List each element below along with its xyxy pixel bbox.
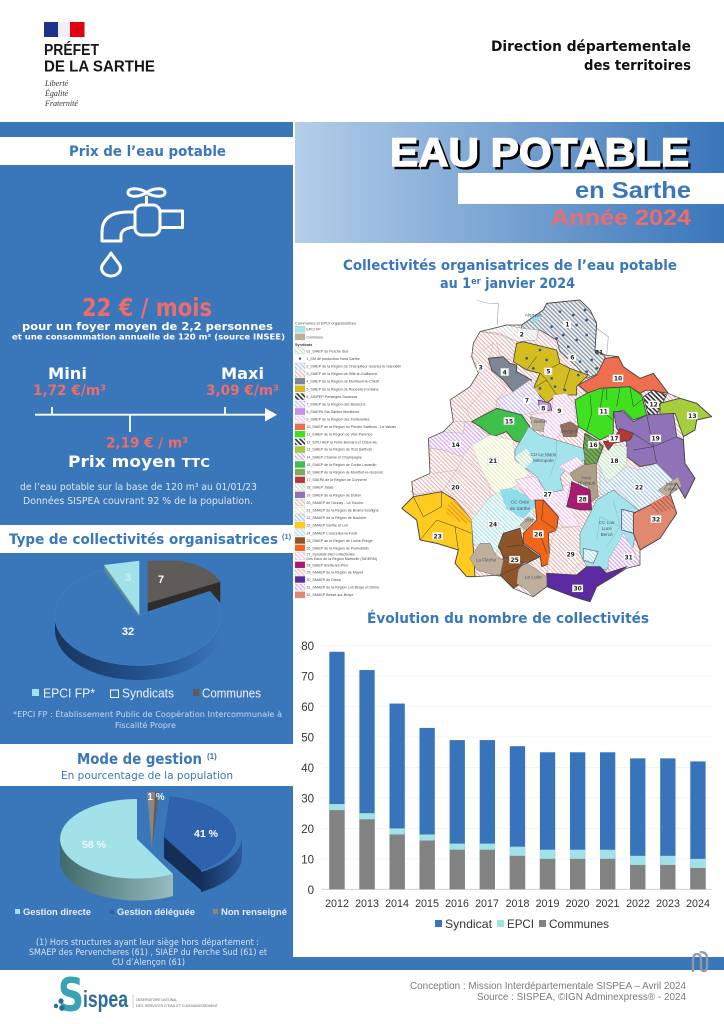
bar chart: évolution du nombre de collectivités: 2016 — [445, 898, 469, 910]
pie chart: type de collectivités — [55, 561, 221, 680]
logo: préfet de la Sarthe: Fraternité — [44, 99, 78, 108]
heading: collectivités organisatrices — [343, 258, 677, 292]
heading: collectivités organisatrices: Collectivités organisatrices de l’eau potable — [343, 258, 677, 274]
pie chart: mode de gestion: 58 % — [82, 839, 107, 851]
title: eau potable: EAU POTABLE — [390, 131, 689, 175]
collectivity names on map: de Sarthe — [510, 506, 530, 511]
legend: type de collectivités: Syndicats — [122, 686, 174, 700]
map legend: Des Eaux de la Région Mancelle (SIDERM) — [306, 557, 377, 561]
logo: préfet de la Sarthe: Liberté — [44, 79, 69, 88]
legend: type de collectivités: Communes — [202, 686, 261, 700]
map legend: 13_SIAEP de la Région de l’Est Sarthois — [306, 448, 372, 452]
note: EPCI FP definition — [13, 708, 282, 730]
bar chart: évolution du nombre de collectivités: 40 — [301, 763, 314, 775]
map legend: Commune — [306, 335, 323, 339]
map legend: 12_SIVU AEP la Ferté-Bernard et Chéré-Au — [306, 440, 377, 444]
region numbers: 16 — [589, 442, 597, 449]
region numbers — [432, 321, 698, 593]
region numbers: 32 — [652, 516, 660, 523]
map legend: 4_SIAEP de la Région de Montreuil-le-Chétif — [306, 380, 380, 384]
region numbers: 31 — [625, 554, 633, 561]
heading: type de collectivités: Type de collectivités organisatrices — [9, 532, 278, 548]
bar chart: évolution du nombre de collectivités: 2014 — [385, 898, 409, 910]
text: household basis: pour un foyer moyen de 2,2 personnes — [22, 320, 273, 333]
map legend: 3_SIAEP de la Région de Sillé-le-Guillaume — [306, 372, 377, 376]
collectivity names on map: La Flèche — [476, 558, 497, 563]
bar chart: évolution du nombre de collectivités: 2023 — [656, 898, 680, 910]
icon: water tap — [102, 189, 182, 276]
region numbers: 28 — [579, 496, 587, 503]
heading: direction départementale: Direction départementale — [491, 39, 691, 55]
logo: préfet de la Sarthe — [44, 22, 155, 108]
collectivity names on map: CU Le Mans — [530, 452, 557, 457]
heading: mode de gestion: Mode de gestion — [77, 750, 202, 768]
legend: mode de gestion: Gestion déléguée — [117, 907, 195, 917]
map legend: 9_SIAEP de la Région des Fontenelles — [306, 418, 370, 422]
map legend: 30_SMAEP de Dienu — [306, 578, 341, 582]
subtitle band: en Sarthe: en Sarthe — [575, 177, 691, 203]
map legend: 32_SMAEP Bessé-sur-Braye — [306, 593, 353, 597]
logo: Sispea: ispea — [83, 986, 128, 1012]
region numbers: 12 — [650, 402, 658, 409]
region numbers: 21 — [489, 458, 497, 465]
heading: collectivités organisatrices: janvier 2024 — [481, 276, 575, 292]
scale: mini maxi average price: 1,72 €/m³ — [33, 383, 106, 399]
bar chart: évolution du nombre de collectivités: 70 — [301, 672, 314, 684]
logo: Sispea: DES SERVICES D’EAU ET D’ASSAINISSEMENT — [136, 1004, 219, 1008]
commune boundaries in EPCI areas — [540, 440, 620, 547]
bar chart: évolution du nombre de collectivités: 2024 — [686, 898, 710, 910]
region numbers: 20 — [451, 484, 459, 491]
collectivity names on map: Alençon — [525, 313, 542, 318]
region numbers: 61 — [595, 350, 603, 357]
commune boundaries — [413, 357, 677, 575]
bar chart: évolution du nombre de collectivités: 60 — [301, 702, 314, 714]
bar chart: évolution du nombre de collectivités: Communes — [549, 917, 609, 931]
map legend: 22_SMAEP de la Région de Bouloire — [306, 516, 366, 520]
bar chart: évolution du nombre de collectivités: 80 — [301, 641, 314, 653]
department outline — [402, 300, 712, 602]
region numbers: 18 — [610, 458, 618, 465]
region numbers: 14 — [452, 442, 460, 449]
heading: mode de gestion: (1) — [207, 752, 217, 761]
heading: mode de gestion — [0, 744, 293, 786]
map legend: 17_SAEPA de la Région de Connerré — [306, 478, 367, 482]
heading: type de collectivités: (1) — [282, 532, 292, 541]
region numbers: 23 — [434, 533, 442, 540]
bar chart: évolution du nombre de collectivités — [301, 641, 712, 931]
credits: Source : SISPEA, ©IGN Adminexpress® - 2024 — [477, 992, 686, 1003]
bar chart: évolution du nombre de collectivités: Syndicat — [445, 917, 493, 931]
price: 22 euros per month: 22 € / mois — [82, 293, 212, 322]
bar chart: évolution du nombre de collectivités: 2018 — [506, 898, 529, 910]
text: household basis — [12, 320, 285, 342]
map legend: 19_SIAEP de la Région de Dollon — [306, 493, 361, 497]
region numbers: 8 — [541, 406, 545, 413]
heading: mode de gestion: En pourcentage de la population — [61, 770, 233, 782]
bar chart: évolution du nombre de collectivités: 10 — [301, 854, 314, 866]
text: price basis note: Données SISPEA couvrant 92 % de la population. — [23, 496, 253, 507]
map legend: 7_SIAEP de la Région des Buissons — [306, 402, 366, 406]
collectivity names on map: Lucé — [602, 526, 612, 531]
heading: prix de l'eau potable — [0, 137, 293, 165]
region numbers: 6 — [570, 355, 574, 362]
pie chart: type de collectivités: 32 — [122, 626, 134, 638]
legend: mode de gestion: Gestion directe — [23, 907, 91, 917]
region numbers: 7 — [525, 398, 529, 405]
map legend: 1_SM de production Nord Sarthe — [306, 357, 360, 361]
region numbers: 5 — [546, 369, 550, 376]
bar chart: évolution du nombre de collectivités: 2012 — [325, 898, 349, 910]
pie chart: mode de gestion: 1 % — [147, 792, 165, 803]
region numbers: 24 — [489, 521, 497, 528]
map of water authorities — [402, 300, 712, 602]
bar chart: évolution du nombre de collectivités: 2020 — [566, 898, 589, 910]
legend: mode de gestion — [15, 907, 287, 917]
heading: évolution: Évolution du nombre de collectivités — [367, 610, 649, 627]
map legend: 24_SMAEP Courcelles-la-Forêt — [306, 531, 357, 535]
map legend: 2_SIAEP de la Région de Champfleur Gesnes-le-Gandelin — [306, 365, 401, 369]
map legend: 27_Syndicat Inter-collectivités — [306, 552, 355, 556]
label: prix moyen TTC: Prix moyen TTC — [68, 452, 210, 471]
map legend: 20_SMAEP de l’Aunay - La Touche — [306, 501, 363, 505]
logo: préfet de la Sarthe: DE LA SARTHE — [44, 58, 155, 76]
region numbers: 29 — [567, 552, 575, 559]
bar chart: évolution du nombre de collectivités: EPCI — [507, 917, 534, 931]
subtitle: année 2024: Année 2024 — [551, 205, 692, 230]
logo: préfet de la Sarthe: Égalité — [44, 88, 69, 98]
legend: type de collectivités — [32, 686, 261, 700]
region numbers: 11 — [600, 409, 608, 416]
map legend: 14_SIAEP Charnie et Champagne — [306, 455, 362, 459]
note: structures hors département — [29, 937, 268, 968]
region numbers: 4 — [503, 369, 507, 376]
region numbers: 19 — [652, 436, 660, 443]
map legend: 28_SIAEP Brette-les-Pins — [306, 563, 348, 567]
collectivity names on map: Bercé — [601, 532, 613, 537]
bar chart: évolution du nombre de collectivités: 2021 — [596, 898, 619, 910]
pie chart: type de collectivités: 3 — [125, 572, 131, 584]
commune boundaries in hatched areas — [433, 342, 500, 490]
legend: type de collectivités: EPCI FP* — [43, 686, 95, 700]
scale: mini maxi average price: 3,09 €/m³ — [206, 383, 279, 399]
note: structures hors département: (1) Hors structures ayant leur siège hors département : — [36, 937, 259, 948]
logo: Sispea: OBSERVATOIRE NATIONAL — [136, 998, 177, 1002]
heading: collectivités organisatrices: er — [471, 277, 481, 287]
scale: mini maxi average price: 2,19 € / m³ — [106, 436, 188, 452]
map legend — [295, 321, 401, 598]
credits — [410, 981, 686, 1003]
region numbers: 13 — [688, 413, 696, 420]
scale: mini maxi average price — [33, 364, 279, 452]
text: price basis note — [20, 482, 257, 507]
logo: préfet de la Sarthe: PRÉFET — [44, 42, 99, 59]
region numbers: 15 — [505, 418, 513, 425]
scale: mini maxi average price: Mini — [48, 364, 87, 383]
collectivity names on map: Oizé — [525, 518, 535, 523]
panel: header gradient — [295, 122, 724, 243]
map legend: 23_SMAEP Sarthe et Loir — [306, 524, 349, 528]
title: eau potable: EAU POTABLE — [392, 134, 692, 178]
bar chart: évolution du nombre de collectivités: 30 — [301, 794, 314, 806]
collectivity names on map: Métropole — [533, 458, 554, 463]
pie chart: mode de gestion — [60, 792, 242, 901]
panel: left blue column — [0, 122, 293, 970]
map legend: 5_SIAEP de la Région de Rouessé-Fontaine — [306, 387, 379, 391]
text: household basis: et une consommation annuelle de 120 m³ (source INSEE) — [12, 332, 285, 342]
credits: Conception : Mission Interdépartementale SISPEA – Avril 2024 — [410, 981, 686, 992]
water source dots — [525, 309, 598, 391]
text: price basis note: de l’eau potable sur la base de 120 m³ au 01/01/23 — [20, 482, 257, 493]
region numbers: 25 — [511, 557, 519, 564]
heading: collectivités organisatrices: au 1 — [440, 276, 474, 292]
region numbers: 22 — [635, 485, 643, 492]
map legend: 15_SIAEP de la Région de Conlie-Lavardin — [306, 463, 376, 467]
bar chart: évolution du nombre de collectivités: 50 — [301, 732, 314, 744]
collectivity names on map: Saint — [665, 481, 677, 486]
map legend: 26_SIAEP de la Région de Pontvallain — [306, 546, 369, 550]
map legend: Syndicats — [295, 343, 312, 347]
map legend: 31_SMAEP de la Région Loir Braye et Dême — [306, 586, 379, 590]
collectivity names on map: Calais — [664, 487, 678, 492]
region numbers: 17 — [610, 436, 618, 443]
map legend: Communes et EPCI organisatrices — [295, 321, 356, 326]
collectivity names on map: CC Loir — [599, 520, 615, 525]
logo: Sispea: S — [58, 968, 84, 1022]
logo: Sispea — [54, 968, 219, 1022]
region numbers: 9 — [557, 408, 561, 415]
note: EPCI FP definition: Fiscalité Propre — [115, 720, 176, 730]
map legend: 8_SIAEPA Ste-Sabine Montbizot — [306, 410, 359, 414]
scale: mini maxi average price: Maxi — [221, 364, 264, 383]
collectivity names on map: CC Orée — [511, 499, 530, 504]
map legend: 29_SMAEP de la Région de Mayet — [306, 571, 363, 575]
heading: direction départementale: des territoires — [584, 58, 691, 74]
note: structures hors département: CU d’Alençon (61) — [112, 958, 185, 968]
map legend: EPCI FP — [306, 328, 321, 332]
bar chart: évolution du nombre de collectivités: 2022 — [626, 898, 650, 910]
heading: type de collectivités — [0, 525, 293, 553]
collectivity names on map: Le Lude — [525, 575, 542, 580]
bar chart: évolution du nombre de collectivités: 0 — [308, 885, 314, 897]
map legend: 01_SIAEP du Perche Sud — [306, 349, 348, 353]
region numbers: 1 — [565, 322, 569, 329]
legend: mode de gestion: Non renseigné — [221, 907, 287, 917]
region numbers: 26 — [534, 531, 542, 538]
note: structures hors département: SMAEP des Pervencheres (61) , SIAEP du Perche Sud (61) et — [29, 948, 268, 958]
pie chart: type de collectivités: 7 — [158, 574, 164, 586]
bar chart: évolution du nombre de collectivités: 2013 — [355, 898, 379, 910]
bar chart: évolution du nombre de collectivités: 2019 — [536, 898, 559, 910]
region numbers: 27 — [544, 492, 552, 499]
bar chart: évolution du nombre de collectivités: 2015 — [415, 898, 439, 910]
collectivity names on map — [476, 313, 678, 580]
pie chart: mode de gestion: 41 % — [194, 828, 219, 840]
map legend: 10_SIAEP de la Région du Perche Sarthois - Le Vairais — [306, 425, 396, 429]
collectivity names on map: l'Évêque — [578, 480, 596, 486]
map legend: 21_SMAEP de la Région de Brains-Souligné — [306, 509, 379, 513]
map legend: 25_SIAEP de la Région de Luché-Pringé — [306, 539, 373, 543]
heading: direction départementale — [491, 39, 691, 74]
region numbers: 2 — [520, 332, 524, 339]
bar chart: évolution du nombre de collectivités: 20 — [301, 824, 314, 836]
region numbers: 3 — [479, 364, 483, 371]
collectivity names on map: Savigné — [561, 429, 578, 434]
region numbers: 10 — [614, 376, 622, 383]
map legend: 16_SIAEP de la Région de Montfort-le-Gesnois — [306, 471, 383, 475]
collectivity names on map: Ballon — [534, 419, 548, 424]
region numbers: 30 — [574, 586, 582, 593]
icon: watermark — [693, 952, 707, 972]
map legend: 18_SIAEP Jalais — [306, 486, 334, 490]
heading: prix de l'eau potable: Prix de l’eau potable — [69, 144, 226, 160]
note: EPCI FP definition: *EPCI FP : Établissement Public de Coopération Intercommunale à — [13, 708, 282, 719]
map legend: 11_SIAEP de la Région de Vive-Parence — [306, 433, 372, 437]
bar chart: évolution du nombre de collectivités: 2017 — [475, 898, 499, 910]
subtitle band: en Sarthe — [458, 173, 724, 204]
collectivity names on map: Yvré- — [581, 475, 593, 480]
bottom blue band — [293, 957, 724, 970]
map legend: 6_SIDPEP Perseigne Saosnois — [306, 395, 357, 399]
